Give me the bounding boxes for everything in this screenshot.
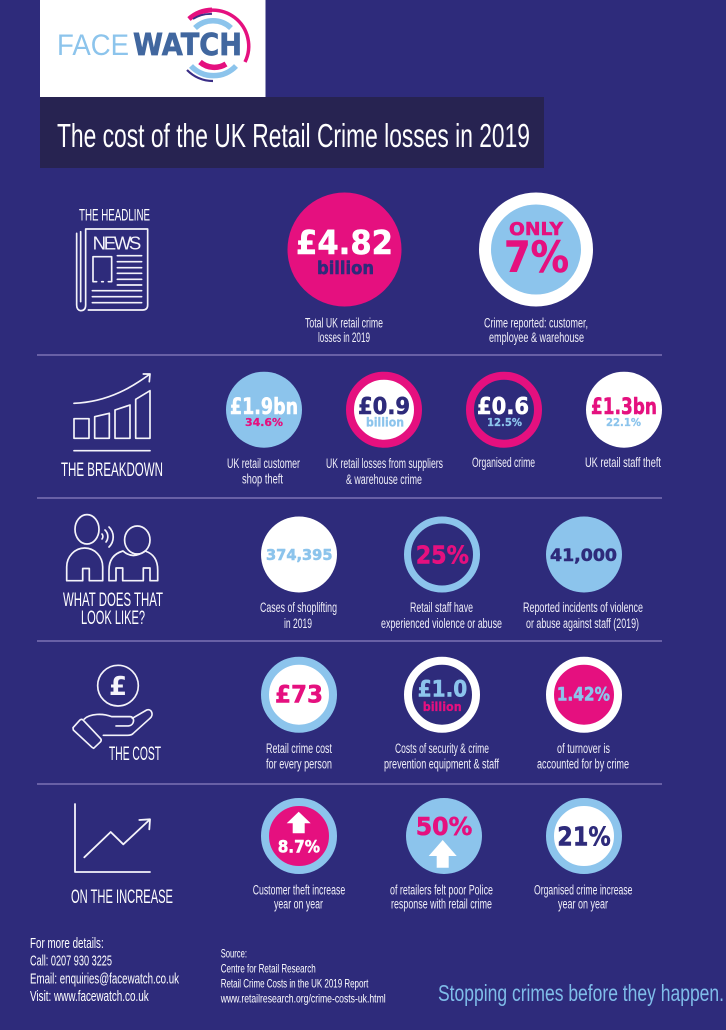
logo: Facewatch: FACE [57,29,129,62]
stat: police response [390,798,493,912]
stat: police response: of retailers felt poor Police [390,882,493,898]
stat: customer theft increase: year on year [274,896,323,912]
stat: staff violence: experienced violence or abuse [381,616,502,631]
stat: police response: 50% [416,812,472,841]
stat: turnover share: accounted for by crime [537,756,629,772]
source credits: Centre for Retail Research [221,961,316,975]
icon: hand holding pound coin [73,665,152,748]
stat: staff violence: Retail staff have [410,600,473,615]
stat: total losses: billion [317,258,374,279]
source credits: Source: [221,946,247,960]
stat: security costs: £1.0 [418,678,467,703]
stat: organised crime increase [534,802,632,912]
title banner [40,97,544,168]
icon: rising line graph [75,804,150,872]
stat: security costs [384,661,499,772]
stat: crime reported: 7% [504,233,569,283]
heading: what does that look like: LOOK LIKE? [81,608,145,629]
stat: suppliers and warehouse: billion [366,416,404,430]
icon: two people talking [67,515,158,581]
stat: total losses: losses in 2019 [318,330,370,345]
stat: cost per person: for every person [266,756,332,772]
stat: organised crime [470,376,538,470]
stat: suppliers and warehouse: UK retail losses from suppliers [326,456,443,471]
source credits: Retail Crime Costs in the UK 2019 Report [221,977,369,991]
stat: staff violence: 25% [416,540,469,569]
contact details: For more details: [30,936,104,952]
stat: staff theft: £1.3bn [591,395,657,420]
stat: organised crime: Organised crime [472,455,535,470]
stat: cost per person: Retail crime cost [266,741,332,756]
stat: suppliers and warehouse: & warehouse crime [346,472,422,487]
stat: security costs: Costs of security & crime [395,741,489,756]
stat: reported incidents: 41,000 [550,546,617,566]
stat: shop theft: UK retail customer [227,456,300,471]
stat: shop theft: £1.9bn [230,395,298,420]
logo: Facewatch [40,0,266,97]
stat: total losses: £4.82 [296,223,393,262]
stat: organised crime increase: 21% [557,823,611,853]
stat: staff theft: 22.1% [606,416,641,429]
stat: security costs: prevention equipment & staff [384,756,499,772]
stat: suppliers and warehouse [326,376,443,487]
stat: suppliers and warehouse: £0.9 [358,394,410,420]
stat: police response: response with retail crime [391,896,492,912]
heading: on the increase: ON THE INCREASE [71,887,173,908]
icon: newspaper: NEWS [93,232,141,253]
panel: the headline [77,192,588,345]
stat: staff theft [585,372,662,470]
stat: total losses [288,192,402,345]
stat: cost per person: £73 [275,681,323,709]
source credits: www.retailresearch.org/crime-costs-uk.html [220,991,386,1005]
stat: staff violence [381,520,502,631]
contact details: Email: enquiries@facewatch.co.uk [30,971,179,987]
stat: shoplifting cases: 374,395 [266,546,332,564]
icon: newspaper [77,229,148,311]
stat: crime reported: employee & warehouse [489,330,584,345]
stat: reported incidents: or abuse against staff (2019) [526,616,639,631]
stat: crime reported [484,198,588,345]
stat: shop theft: 34.6% [245,416,283,429]
stat: crime reported: ONLY [509,219,564,240]
stat: reported incidents [523,516,643,631]
stat: security costs: billion [423,699,462,714]
stat: customer theft increase: 8.7% [278,838,320,858]
stat: customer theft increase [253,802,345,912]
stat: organised crime: 12.5% [487,416,522,429]
panel: what does that look like [63,515,643,631]
stat: shoplifting cases: in 2019 [284,616,312,631]
stat: shop theft [226,372,302,486]
stat: staff theft: UK retail staff theft [585,455,661,470]
panel: the cost [73,661,629,772]
stat: turnover share [537,661,629,772]
stat: turnover share: of turnover is [557,741,610,756]
panel: the breakdown [61,372,662,487]
heading: the cost: THE COST [109,744,161,765]
stat: shoplifting cases [260,516,337,631]
contact details: Visit: www.facewatch.co.uk [30,989,149,1005]
icon: hand holding pound coin: £ [109,672,127,702]
stat: turnover share: 1.42% [557,684,610,706]
contact details: Call: 0207 930 3225 [30,954,112,970]
stat: reported incidents: Reported incidents of violence [523,600,643,615]
stat: cost per person [265,661,333,772]
logo: Facewatch: WATCH [133,28,242,63]
source credits [220,946,386,1005]
stat: organised crime: £0.6 [477,394,529,420]
stat: organised crime increase: year on year [558,896,608,912]
heading: the headline: THE HEADLINE [79,206,150,224]
stat: customer theft increase: Customer theft increase [253,882,345,898]
stat: crime reported: Crime reported: customer, [484,316,588,330]
stat: shop theft: shop theft [242,472,283,486]
icon: rising bar chart [74,374,150,451]
stat: organised crime increase: Organised crime increase [534,882,632,898]
title banner: The cost of the UK Retail Crime losses in 2019 [57,117,530,154]
stat: shoplifting cases: Cases of shoplifting [260,600,337,615]
heading: what does that look like [63,590,163,629]
panel: on the increase [71,798,632,912]
contact details [30,936,179,1005]
heading: the breakdown: THE BREAKDOWN [61,460,163,481]
stat: total losses: Total UK retail crime [305,316,383,330]
heading: what does that look like: WHAT DOES THAT [63,590,163,611]
